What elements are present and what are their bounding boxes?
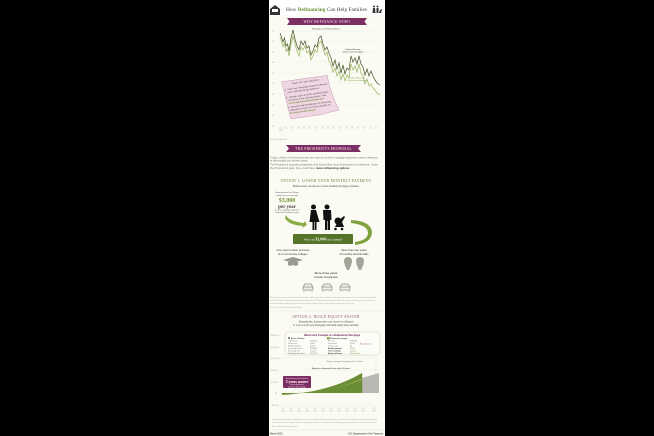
column: before: $1,199 [310, 346, 315, 348]
option 2 subheading: Alternatively, homeowners can choose to refinance [298, 320, 354, 324]
x axis labels: 2032 [361, 410, 365, 412]
x axis labels: 2018 [305, 410, 309, 412]
column: before: Remaining term [288, 350, 301, 352]
y axis labels: $25,000 [271, 382, 278, 384]
x axis labels: 07 [345, 128, 347, 130]
callout: 5 years sooner: than refinancing [291, 383, 303, 386]
column: before: $112,000 [310, 353, 317, 355]
x axis labels: 2028 [345, 410, 349, 412]
x axis labels: 06 [333, 128, 335, 130]
option 1 footnotes: from the College Board. Average monthly electric bill from the U.S. Energy Information Administration. Annual auto insurance premium average from [270, 299, 375, 302]
chart subtitle: Mortgage and Federal Rates [312, 28, 341, 30]
x axis labels: 11 [375, 128, 377, 130]
intro text: Today, millions of Americans who are current on their mortgage payments cannot refinance [270, 156, 379, 160]
column: after: Equity built faster [328, 352, 343, 355]
column: after: 20 years [350, 350, 357, 352]
savings callout: could save an average [276, 194, 299, 197]
sticky note: your information: website to find out if you qualify at [289, 103, 331, 112]
y axis labels: $50,000 [271, 370, 278, 372]
x axis labels: 02 [291, 128, 293, 130]
callout: 5 years sooner: Homeowners who refinance [286, 378, 308, 380]
callout: 5 years sooner [283, 376, 311, 393]
x axis labels: 03 [303, 128, 305, 130]
icon: light bulbs [344, 257, 364, 270]
item: tuition: at a community college 1 [278, 252, 309, 256]
column: before: 25 years [310, 350, 317, 352]
column: after: Refinanced mortgage [330, 337, 347, 340]
header [269, 0, 385, 15]
light green area: original equity [295, 378, 362, 393]
x axis labels: 06 [339, 128, 341, 130]
line: dark rate [280, 30, 380, 85]
callout: what can 3000 buy: What can $3,000 buy a family? [304, 238, 343, 242]
x axis labels: Yr 13 [329, 407, 334, 410]
callout: what can 3000 buy [293, 234, 353, 244]
x axis labels: Yr 3 [289, 407, 292, 410]
option 1 subheading: Homeowners can choose a lower monthly mortgage payment. [293, 185, 360, 188]
title: How Refinancing Can Help Families [286, 7, 367, 13]
arrow: right green [351, 220, 372, 245]
sticky note: your information [282, 74, 339, 119]
column: after: Closing costs [328, 344, 338, 348]
column: after: New lower rate [360, 342, 371, 346]
column: after: New loan [328, 340, 335, 342]
x axis labels: Yr 5 [297, 407, 300, 410]
y axis labels: $200,000 [271, 335, 279, 337]
sticky note: your information: makinghomeaffordable.gov [288, 97, 326, 105]
x axis labels: Jan [279, 128, 282, 130]
x axis labels: Yr 25 [372, 407, 377, 410]
option 2 subheading: to a no-cost 20-year mortgage and build equity more quickly. [293, 324, 359, 327]
column: before: $200,000 [310, 340, 317, 342]
option 2 subheading [293, 320, 359, 327]
y axis labels: $0 [275, 393, 277, 395]
y axis labels: 3.0 [272, 126, 276, 128]
x axis labels: 03 [297, 128, 299, 130]
option 1 footnotes: Based on average interest rates for first-lien, fixed-rate, FHA-insured and non-GSE loans. Average annual tuition and fees at U.S. community colleges [270, 296, 377, 299]
y axis labels: 4.0 [272, 105, 276, 107]
sticky note: your information: hud.gov/refinance [290, 108, 317, 115]
savings callout [275, 191, 300, 214]
sticky note: your information: Visit for information: [292, 78, 320, 85]
x axis labels: 2016 [297, 410, 301, 412]
x axis labels: Yr 15 [337, 407, 342, 410]
savings callout: Homeowners like Shaun [275, 191, 300, 194]
x axis labels: Yr 1 [281, 407, 284, 410]
x axis labels: 2030 [353, 410, 357, 412]
item: auto insurance [303, 271, 350, 292]
column: after: $180,000 [350, 340, 357, 342]
x axis labels: 04 [285, 128, 287, 130]
column: before: Original loan [288, 340, 298, 342]
item: electric bills: of monthly electric bills 2 [339, 252, 370, 256]
x axis labels: 10 [369, 128, 371, 130]
callout: 5 years sooner: 5 years sooner [286, 380, 309, 384]
column: before: Monthly payment [288, 344, 301, 348]
line label: conforming rate: 15-year fixed mortgage [347, 79, 368, 82]
item: electric bills [339, 248, 370, 270]
panel: mortgage example [285, 332, 380, 355]
column: after: Monthly payment [328, 347, 342, 350]
savings callout: per year [278, 205, 297, 210]
arrow: left green [285, 215, 307, 228]
y axis labels: 3.5 [272, 115, 276, 117]
y axis labels [272, 31, 276, 128]
x axis labels: 2012 [281, 410, 285, 412]
panel: mortgage example: Illustrative Example of a Refinanced Mortgage [304, 334, 361, 337]
page panel [269, 0, 385, 436]
chart label: total equity: Equity in refinanced home after 20 years [312, 367, 351, 370]
sticky note: your information: 2. Speak with a HUD-certified loan [286, 90, 330, 99]
chart label: original equity: Equity in original mortgage after 25 years [327, 360, 363, 363]
column: before: $180,000 [310, 348, 317, 350]
option 1 footnotes [270, 296, 377, 309]
sticky note: your information: your refinancing options. [287, 86, 321, 94]
option 1 footnotes: Source: White House and Treasury calculations [270, 306, 302, 309]
x axis labels: 04 [309, 128, 311, 130]
x axis labels: Yr 19 [353, 407, 358, 410]
y axis labels: 5.5 [272, 73, 276, 75]
x axis labels: 05 [321, 128, 323, 130]
x axis labels: 10 [363, 128, 365, 130]
item: auto insurance: of auto insurance 3 [314, 275, 339, 279]
icon: family silhouette [309, 204, 345, 230]
option 1 footnotes: the National Association of Insurance Commissioners. Savings may vary depending on borrower's loan terms. [270, 302, 355, 305]
green area: refinanced equity [282, 373, 362, 395]
source note: Source: Freddie Mac [270, 138, 288, 141]
intro text: The President's proposing legislation that would allow more homeowners to refinance. Under [270, 162, 378, 166]
y axis labels [271, 335, 279, 407]
footer [270, 432, 384, 436]
heading: option 2: OPTION 2: BUILD EQUITY FASTER [292, 315, 360, 319]
x axis labels: Yr 17 [345, 407, 350, 410]
chart: mortgage rates [270, 28, 380, 141]
chart: equity comparison [271, 335, 379, 412]
line label: conforming rate: National Average [349, 76, 365, 80]
banner: why refinance now: WHY REFINANCE NOW? [303, 20, 351, 24]
x axis labels: Yr 7 [305, 407, 308, 410]
y axis labels: $100,000 [271, 358, 279, 360]
line label: average rate: 30-year fixed mortgage [343, 50, 364, 54]
x axis labels [279, 128, 377, 132]
x axis labels: 05 [327, 128, 329, 130]
banner: the president's proposal: THE PRESIDENT'S PROPOSAL [295, 147, 352, 151]
item: auto insurance: More three years [315, 271, 338, 275]
savings callout: under the President's plan [275, 211, 299, 214]
callout: 5 years sooner: with their old mortgage [288, 385, 306, 388]
column: before: Remaining balance [288, 348, 303, 350]
x axis labels: Yr 20 [361, 407, 366, 410]
x axis labels: 2026 [337, 410, 341, 412]
icon: house and money [270, 5, 280, 15]
column: before: 6.00% [310, 343, 315, 345]
footer: U.S. Department of the Treasury [348, 432, 384, 436]
y axis labels: 7.5 [272, 31, 276, 33]
sticky note: your information: 1. Visit your mortgage lender to discuss [285, 82, 328, 91]
x axis labels: 2022 [321, 410, 325, 412]
column: after: $60,000 more [350, 352, 360, 355]
banner: the president's proposal [286, 145, 361, 152]
column: after: Term remaining [328, 350, 341, 352]
x axis labels: 2014 [289, 410, 293, 412]
sticky note: your information: counselor if you have questions. Find [288, 94, 327, 102]
intro text: at historically low interest rates. [270, 158, 308, 162]
y axis labels: 6.5 [272, 52, 276, 54]
column: before: Before refinance [291, 338, 304, 340]
option 2 footnotes: Source: White House calculations [272, 425, 298, 428]
option 2 footnotes: costs paid by the lender. Equity calculated as original home value less remaining principal. Monthly payment stays about the same as before refinance. [272, 421, 377, 424]
icon: family [372, 6, 382, 13]
column: after [327, 337, 371, 355]
icon: cars [303, 284, 350, 292]
column: before: Total equity after 20 yrs [288, 352, 306, 355]
column: before [288, 337, 317, 355]
column: after: 4.00% [350, 343, 355, 345]
y axis labels: 6.0 [272, 62, 276, 64]
footer: March 2012 [270, 434, 283, 436]
savings callout: $3,000 [279, 197, 295, 204]
column: before: Interest rate [288, 342, 297, 345]
line label: average rate: National Average [345, 48, 361, 51]
intro text [270, 156, 379, 170]
item: tuition: One year's tuition and fees [276, 248, 310, 252]
column: after: Interest rate [328, 342, 337, 345]
heading: option 1: OPTION 1: LOWER YOUR MONTHLY PAYMENT [281, 179, 372, 183]
column: after: $1,091 [350, 348, 355, 350]
y axis labels: 7.0 [272, 41, 276, 43]
y axis labels: 5.0 [272, 83, 276, 85]
line: light green rate [280, 36, 380, 95]
x axis labels: 04 [315, 128, 317, 130]
item: electric bills: More than two years [341, 248, 367, 252]
savings callout: on their mortgage payments [275, 208, 299, 212]
x axis labels [281, 407, 377, 412]
x axis labels: 09 [357, 128, 359, 130]
y axis labels: 4.5 [272, 94, 276, 96]
x axis labels: 08 [351, 128, 353, 130]
intro text: the President's plan, they could have more refinancing options. [270, 166, 350, 170]
sticky note: your information: 3. Visit the Administration's housing [287, 100, 332, 109]
column: after: $0 [350, 346, 352, 348]
option 2 footnotes [272, 418, 377, 428]
banner: why refinance now [287, 18, 367, 25]
y axis labels: $150,000 [271, 347, 279, 349]
option 2 footnotes: Illustrative example assumes a borrower with a 6 percent mortgage who has paid for five years and refinances to a 4 percent, 20-year loan with closing [272, 418, 377, 421]
x axis labels: 2037 [372, 410, 376, 412]
icon: graduation cap [283, 257, 303, 266]
x axis labels: 2024 [329, 410, 333, 412]
x axis labels: 2020 [313, 410, 317, 412]
gray area: original mortgage [362, 373, 379, 393]
item: tuition [276, 248, 310, 266]
x axis labels: Yr 11 [321, 407, 325, 410]
x axis labels: Yr 9 [313, 407, 316, 410]
y axis labels: -$25,000 [271, 405, 278, 407]
x axis labels: 2002 [279, 130, 283, 132]
